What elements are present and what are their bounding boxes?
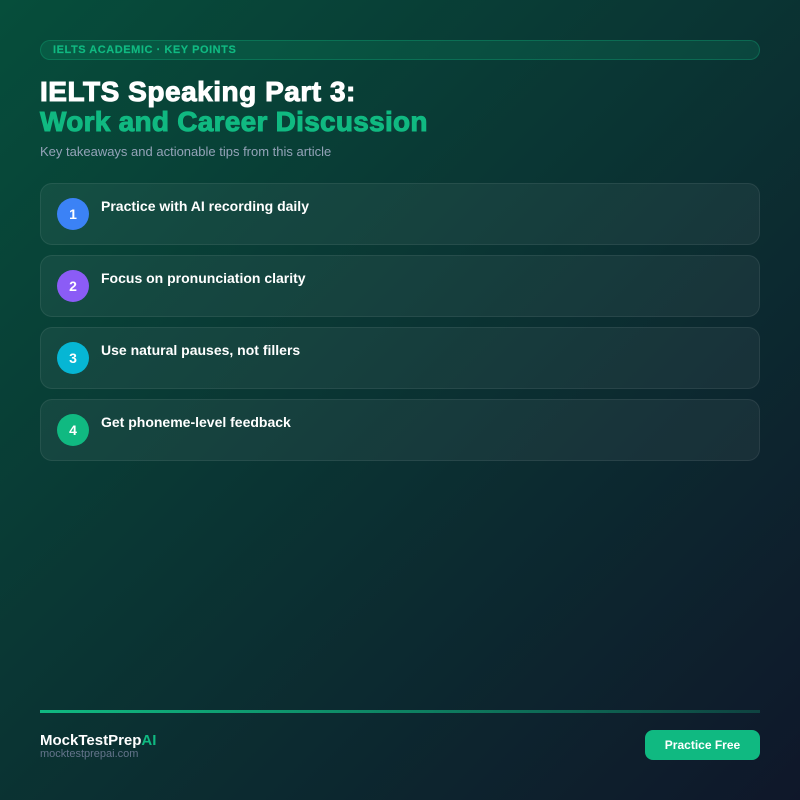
- badge: category label: IELTS ACADEMIC · KEY POINTS: [53, 44, 236, 56]
- subtitle: Key takeaways and actionable tips from this article: [40, 144, 331, 159]
- icon: number 2: 2: [69, 278, 77, 294]
- panel: key point 4: [40, 399, 760, 461]
- icon: number 2: [57, 270, 89, 302]
- icon: number 4: [57, 414, 89, 446]
- icon: number 3: 3: [69, 350, 77, 366]
- website url: mocktestprepai.com: [40, 748, 138, 760]
- text: key point 2: Focus on pronunciation clarity: [101, 270, 306, 286]
- title: [39, 76, 428, 137]
- badge: category label: [40, 40, 760, 60]
- text: key point 4: Get phoneme-level feedback: [101, 414, 291, 430]
- panel: key point 2: [40, 255, 760, 317]
- title: IELTS Speaking Part 3:: [40, 76, 356, 107]
- icon: number 1: [57, 198, 89, 230]
- icon: number 4: 4: [69, 422, 77, 438]
- call to action button: [645, 730, 760, 760]
- text: key point 3: Use natural pauses, not fillers: [101, 342, 300, 358]
- brand name: MockTestPrepAI: [40, 732, 156, 749]
- icon: number 3: [57, 342, 89, 374]
- title: Work and Career Discussion: [40, 106, 428, 137]
- call to action button: Practice Free: [665, 738, 740, 752]
- panel: key point 3: [40, 327, 760, 389]
- text: key point 1: Practice with AI recording daily: [101, 198, 309, 214]
- panel: key point 1: [40, 183, 760, 245]
- icon: number 1: 1: [69, 206, 77, 222]
